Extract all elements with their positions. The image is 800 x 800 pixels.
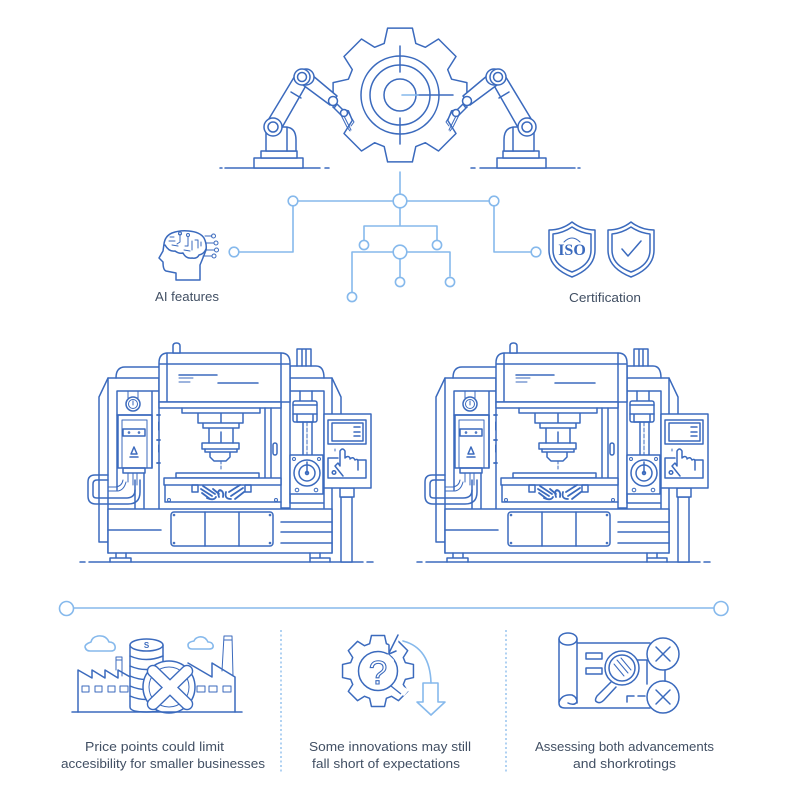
label: Certification: Certification <box>569 291 641 305</box>
machine stand <box>340 488 354 562</box>
icon: factory with coins and cross <box>72 636 242 713</box>
divider left <box>280 630 282 772</box>
icon: ISO shield: ISO <box>558 242 586 259</box>
icon: factory with coins and cross: S <box>144 641 150 650</box>
caption: assessing: and shorkrotings <box>573 756 677 771</box>
machine right column <box>290 391 323 503</box>
machine right <box>417 343 710 562</box>
icon: check shield <box>608 222 654 277</box>
machine control panel <box>324 414 371 488</box>
right robot arm <box>446 69 580 168</box>
machine base <box>80 509 373 562</box>
left robot arm <box>220 69 354 168</box>
icon: gear with question mark <box>343 632 445 715</box>
label: AI features: AI features <box>155 290 219 304</box>
machine left motor <box>117 391 152 485</box>
timeline <box>60 602 728 616</box>
caption: price points: Price points could limit <box>85 739 224 754</box>
machine work table <box>157 415 281 502</box>
caption: assessing: Assessing both advancements <box>535 739 715 754</box>
divider right <box>505 630 507 772</box>
machine frame <box>99 366 341 553</box>
machine spindle <box>182 408 277 478</box>
central gear <box>333 28 467 162</box>
icon: AI brain head <box>159 231 218 280</box>
caption: innovations: Some innovations may still <box>309 739 471 754</box>
caption: innovations: fall short of expectations <box>312 756 461 771</box>
machine pipes <box>88 475 140 504</box>
connector network <box>229 172 541 302</box>
icon: gear with question mark: ? <box>369 654 387 691</box>
caption: price points: accesibility for smaller businesses <box>61 756 266 771</box>
machine left <box>80 343 373 562</box>
icon: ISO shield <box>549 222 595 277</box>
machine top housing <box>159 343 311 408</box>
icon: blueprint with magnifier <box>559 633 679 713</box>
